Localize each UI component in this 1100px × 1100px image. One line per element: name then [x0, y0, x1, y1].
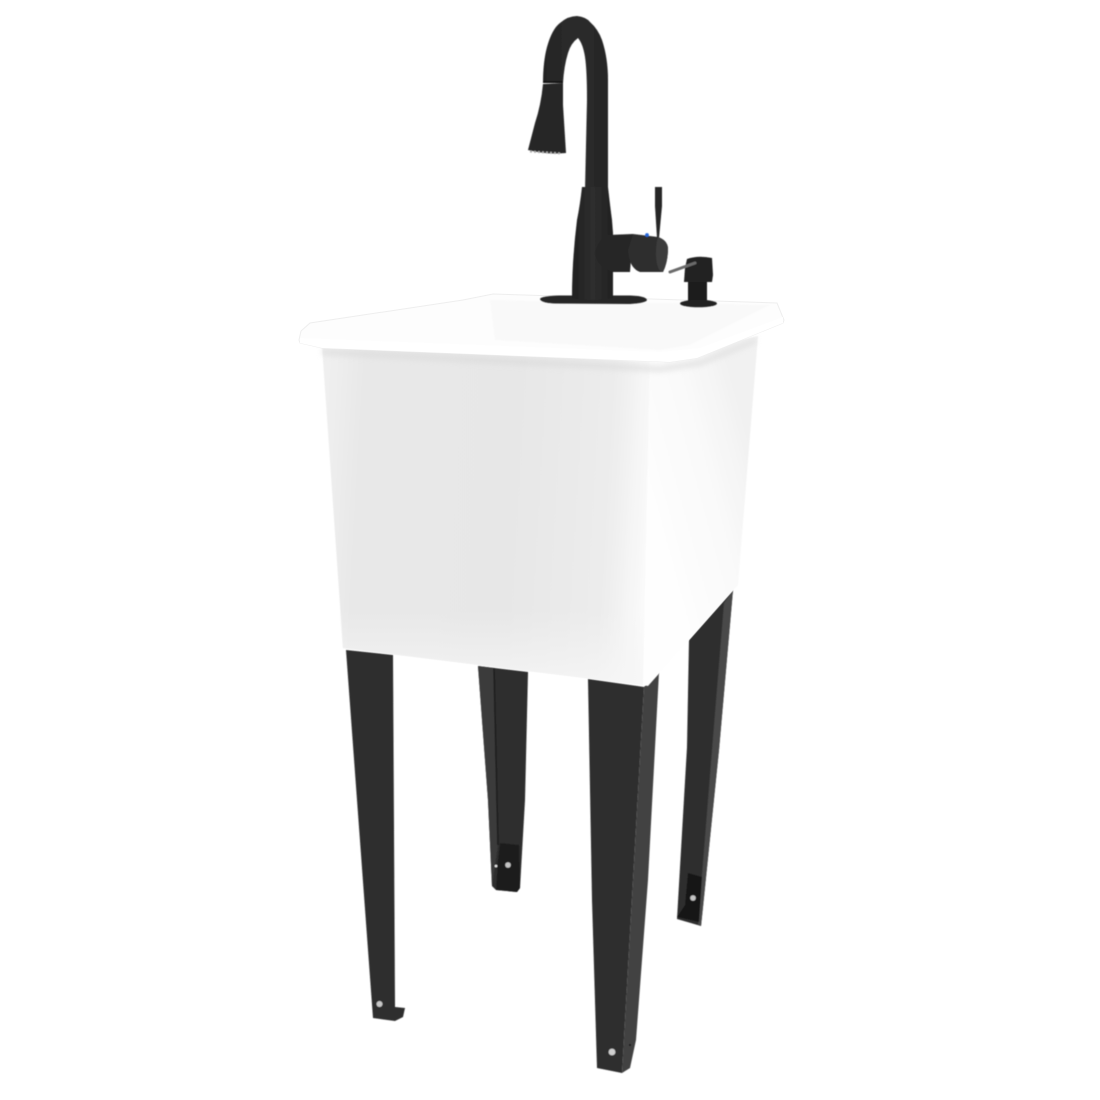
spray nozzles [530, 152, 562, 154]
back right leg [677, 590, 733, 926]
rim front lip [300, 317, 783, 362]
pump neck [688, 281, 707, 301]
gooseneck [543, 16, 608, 190]
plunger [670, 263, 695, 272]
deck plate [540, 296, 647, 304]
middle leg bracket [496, 843, 520, 892]
front corner leg [588, 672, 659, 1073]
basin opening shade [490, 300, 770, 350]
pump base [680, 300, 717, 307]
right leg bracket [677, 873, 702, 922]
handle cap [628, 234, 668, 272]
handle connector [595, 234, 633, 272]
tub right face [643, 336, 758, 686]
rim shadow [322, 338, 756, 372]
soap dispenser [670, 257, 717, 307]
front left leg [346, 650, 405, 1021]
faucet body [572, 187, 613, 300]
spray head [528, 83, 566, 154]
handle lever [655, 187, 662, 238]
pump head [684, 257, 713, 282]
tub front lower highlight [336, 590, 650, 685]
faucet [528, 16, 668, 304]
tub rim [299, 294, 784, 362]
tub front face [322, 346, 667, 685]
sink tub [299, 294, 784, 686]
back middle leg [478, 666, 528, 892]
blue indicator [645, 233, 649, 237]
